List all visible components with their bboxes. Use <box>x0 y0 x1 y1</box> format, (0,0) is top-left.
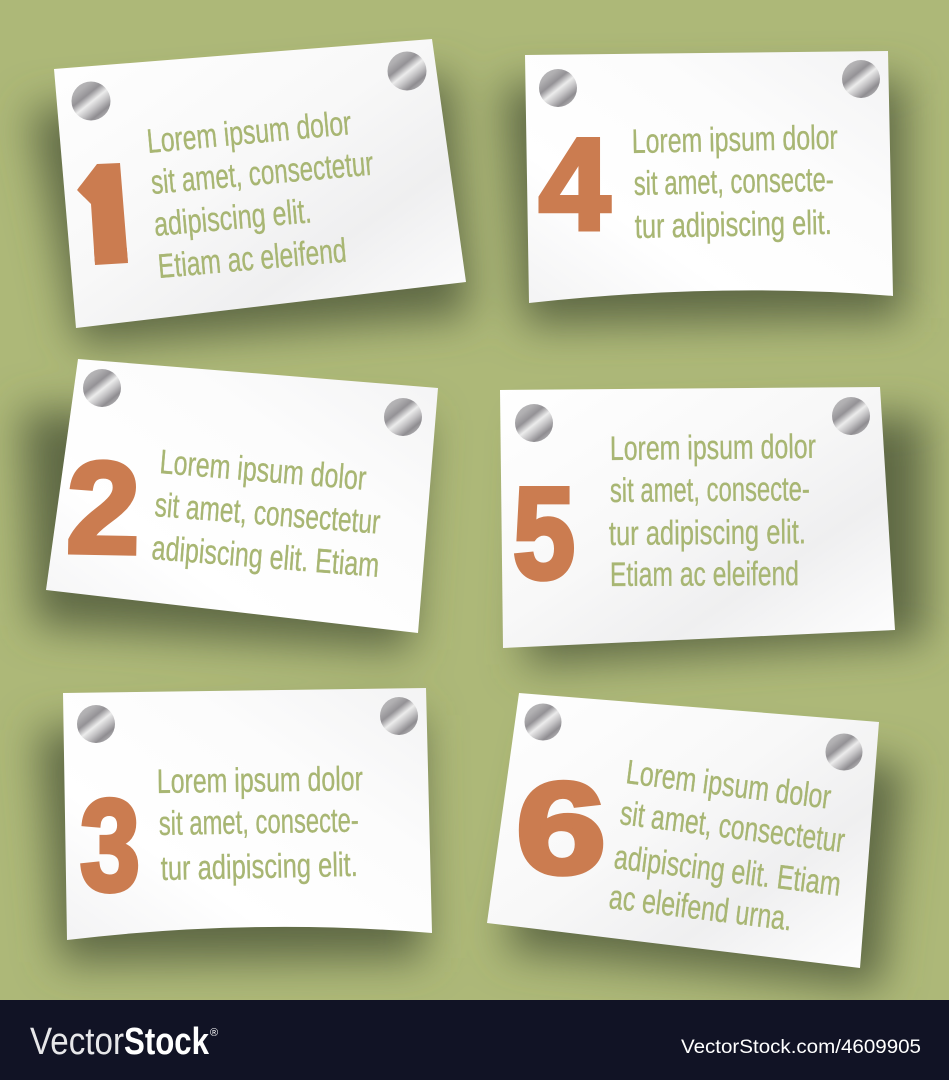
text block <box>157 760 363 888</box>
logo: Stock <box>124 1021 210 1063</box>
image id: VectorStock.com/4609905 <box>681 1037 921 1058</box>
icon: pin <box>72 82 110 120</box>
icon: pin <box>524 704 562 740</box>
panel: note 6 <box>487 693 879 968</box>
text block: adipiscing elit. Etiam <box>612 838 843 904</box>
text block: adipiscing elit. Etiam <box>150 529 381 585</box>
text block: sit amet, consectetur <box>618 794 847 860</box>
icon: pin <box>388 52 426 90</box>
text block: sit amet, consectetur <box>149 145 375 202</box>
icon: pin <box>826 734 862 770</box>
number 1: 1 <box>69 143 141 290</box>
logo: Vector <box>30 1021 124 1063</box>
number 6: 6 <box>516 755 606 901</box>
text block: tur adipiscing elit. <box>609 513 806 553</box>
text block <box>609 428 816 594</box>
icon: pin <box>515 404 553 442</box>
text block: Lorem ipsum dolor <box>145 104 353 161</box>
icon: pin <box>832 397 870 435</box>
number 4: 4 <box>539 111 610 257</box>
panel: note 3 <box>63 688 432 940</box>
text block: adipiscing elit. <box>152 192 313 244</box>
text block: sit amet, consectetur <box>153 486 382 542</box>
logo: ® <box>210 1027 218 1039</box>
text block: ac eleifend urna. <box>607 878 794 938</box>
text block: Lorem ipsum dolor <box>157 760 363 801</box>
text block: sit amet, consecte- <box>158 802 359 843</box>
text block <box>607 753 847 938</box>
text block: tur adipiscing elit. <box>634 204 832 246</box>
number 5: 5 <box>513 460 575 606</box>
icon: pin <box>380 697 418 735</box>
icon: pin <box>384 398 422 436</box>
number 3: 3 <box>80 772 140 918</box>
panel: note 2 <box>46 359 438 633</box>
icon: pin <box>539 69 577 107</box>
text block: sit amet, consecte- <box>610 470 810 510</box>
text block <box>150 443 382 585</box>
text block <box>631 119 838 246</box>
text block: tur adipiscing elit. <box>160 846 358 888</box>
icon: pin <box>77 705 115 743</box>
panel: note 1 <box>54 39 466 328</box>
text block: sit amet, consecte- <box>633 161 834 203</box>
panel: note 5 <box>500 387 895 648</box>
panel: note 4 <box>525 51 893 303</box>
footer bar <box>0 1000 949 1080</box>
number 2: 2 <box>66 434 141 581</box>
icon: pin <box>83 369 121 407</box>
text block: Etiam ac eleifend <box>156 232 348 286</box>
text block: Lorem ipsum dolor <box>624 753 833 817</box>
text block: Etiam ac eleifend <box>610 555 799 594</box>
text block <box>145 104 375 286</box>
text block: Lorem ipsum dolor <box>158 443 368 498</box>
logo <box>30 1021 218 1063</box>
text block: Lorem ipsum dolor <box>610 428 816 468</box>
icon: pin <box>842 60 880 98</box>
text block: Lorem ipsum dolor <box>631 119 838 161</box>
